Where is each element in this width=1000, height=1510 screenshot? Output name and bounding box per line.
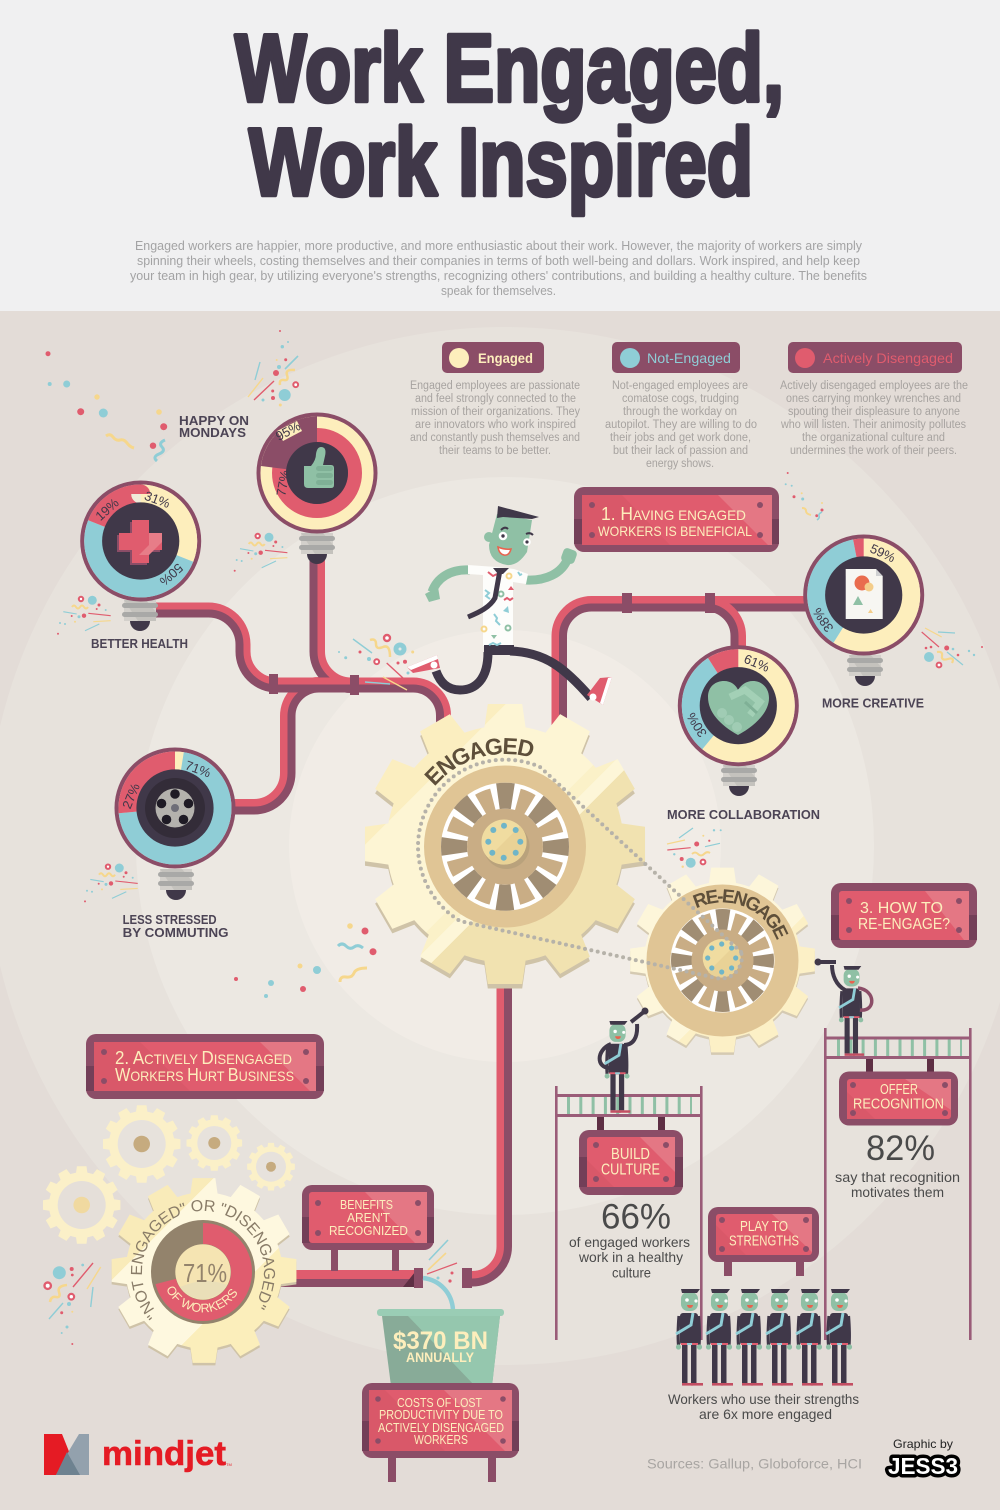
gear: re-engage [630,868,815,1055]
description: not engaged: their jobs and get work done, [610,432,751,444]
title [235,15,784,216]
stat: 82 percent [835,1129,960,1200]
description: actively disengaged [780,380,968,457]
label: happy on mondays: MONDAYS [179,425,246,440]
legend: engaged [442,342,544,373]
small decorative gears [43,1105,295,1244]
caption: workers who use their strengths: Workers who use their strengths [668,1391,859,1407]
dotted belt linking gears [418,760,742,979]
intro paragraph: your team in high gear, by utilizing everyone's strengths, recognizing others' contributions, and building a healthy culture. The benefits [130,268,867,283]
pipe: better health to engaged gear [150,606,447,730]
description: actively disengaged: spouting their displeasure to anyone [788,406,960,418]
sign: costs of lost productivity: PRODUCTIVITY DUE TO [379,1408,503,1422]
confetti: left of the 71 percent gear [44,1263,101,1345]
icon: handshake heart [708,681,769,735]
pipe: branch to collaboration bulb [700,600,742,655]
sign: benefits aren't recognized: RECOGNIZED [329,1224,408,1238]
bulb: better health: 31% [143,488,173,511]
bulb: more collaboration: 30% [683,710,710,740]
description: engaged [410,380,580,457]
credit: graphic by jess3: JESS3 [888,1453,958,1479]
confetti: near the runner's back foot [338,635,414,678]
bulb: more creative: 59% [868,541,898,565]
bucket: $370 bn annually: ANNUALLY [406,1349,475,1365]
pipe collars on right branch [622,593,715,613]
bulb: happy on mondays: 77% [273,468,293,497]
icon: document [846,569,883,619]
label: more collaboration: MORE COLLABORATION [667,807,820,822]
gear: engaged: ENGAGED [424,738,534,786]
stat: 66 percent: work in a healthy [578,1249,683,1265]
caption: workers who use their strengths [668,1391,859,1422]
stat: 66 percent: 66% [601,1198,671,1236]
pipe: engaged gear down to the break [468,975,508,1282]
pipe: right branch to creative bulb [556,600,810,735]
sign: 3. how to re-engage: RE-ENGAGE? [858,916,950,933]
intro paragraph: Engaged workers are happier, more productive, and more enthusiastic about their work. However, the majority of workers are simply [135,238,862,253]
sign: benefits aren't recognized [302,1185,434,1271]
description: not engaged: energy shows. [646,458,714,470]
credit: graphic by jess3: Graphic by [893,1437,953,1451]
label: less stressed by commuting [123,912,229,940]
sign: build culture [579,1117,683,1195]
confetti: bursts near bulbs [57,533,287,902]
scaffold: build culture [555,1086,703,1340]
pipe collar at the break, right [462,1268,472,1288]
bulb: happy on mondays: 95% [273,418,303,444]
confetti at pipe break [427,1240,457,1283]
sign: play to strengths [708,1207,819,1276]
description: not engaged [605,380,757,470]
intro paragraph [130,238,867,298]
intro paragraph: spinning their wheels, costing themselves and their companies in terms of both well-being and dollars. Work inspired, and help keep [137,253,860,268]
description: engaged: mission of their organizations. They [411,406,580,418]
sign: 3. how to re-engage: 3. HOW TO [860,900,943,917]
small gear one [103,1105,180,1183]
confetti: above the more creative bulb [785,472,824,520]
label: less stressed by commuting: BY COMMUTING [123,925,229,940]
shirt pattern [482,572,522,645]
bulb: less stressed by commuting: 27% [119,781,143,811]
description: not engaged: Not-engaged employees are [612,380,748,392]
legend: engaged: Engaged [478,350,533,366]
description: actively disengaged: Actively disengaged employees are the [780,380,968,392]
bucket: $370 bn annually [377,1309,504,1386]
gear: 71 percent of workers: 71% [183,1258,227,1288]
pipe collars on main pipe [269,674,359,695]
sign: offer recognition: RECOGNITION [853,1096,944,1112]
sign: offer recognition [839,1059,958,1126]
label: re-engage: RE-ENGAGE [692,889,788,940]
sign: costs of lost productivity: COSTS OF LOST [397,1396,482,1410]
logo: mindjet: TM [226,1462,232,1467]
bulb: more collaboration [680,647,797,796]
bulb: less stressed by commuting [116,750,234,900]
description: not engaged: comatose cogs, trudging [622,393,739,405]
description: actively disengaged: undermines the work of their peers. [790,445,957,457]
small gear body [630,868,815,1052]
bulb: more creative [805,536,922,686]
main background with concentric rings [0,311,1000,1510]
legend: actively disengaged: Actively Disengaged [823,350,953,366]
bulb: better health: 50% [156,560,186,589]
workers row [676,1289,853,1386]
gear: 71 percent of workers: OF WORKERS [168,1286,237,1312]
bucket: $370 bn annually: $370 BN [393,1327,488,1355]
sign: costs of lost productivity: WORKERS [414,1433,468,1447]
stat: 66 percent [569,1198,690,1280]
small gear two [186,1115,242,1171]
pipe: happy on mondays to main [314,555,351,689]
description: engaged: Engaged employees are passionate [410,380,580,392]
bulb: more collaboration: 61% [742,651,772,675]
label: happy on mondays: HAPPY ON [179,413,249,428]
chip behind 95 percent [277,421,302,441]
logo: mindjet [44,1434,232,1475]
pipe: 71 percent gear to the break [280,1268,423,1288]
legend: not engaged: Not-Engaged [647,350,731,366]
label: better health: BETTER HEALTH [91,636,188,651]
sign: 1. having engaged workers: WORKERS IS BENEFICIAL [598,523,752,539]
gear: engaged [365,704,645,988]
confetti: top left [46,351,167,461]
icon: thumbs up [304,447,334,488]
confetti: left of the engaged gear [234,923,376,998]
confetti: below more collaboration [667,828,722,868]
description: engaged: and constantly push themselves and [410,432,580,444]
small gear four [43,1166,120,1244]
sign: benefits aren't recognized: AREN'T [347,1211,390,1225]
sign: offer recognition: OFFER [880,1081,918,1098]
confetti streaks over main pipe [365,677,407,690]
title: Work Engaged, [235,15,784,122]
legend: not engaged [612,342,740,373]
label: less stressed by commuting: LESS STRESSED [123,912,217,927]
intro paragraph: speak for themselves. [441,283,556,298]
sign: 2. actively disengaged workers [86,1034,324,1099]
description: actively disengaged: who will listen. Their animosity pollutes [780,419,966,431]
sign: 2. actively disengaged workers: 2. ACTIVELY DISENGAGED [115,1048,292,1068]
confetti: near the more creative bulb [922,628,983,667]
description: not engaged: autopilot. They are willing to do [605,419,757,431]
bulb: better health: 19% [92,495,122,524]
sign: 1. having engaged workers [574,487,779,552]
description: actively disengaged: ones carrying monkey wrenches and [786,393,961,405]
sign: build culture: BUILD [611,1146,650,1163]
sign: benefits aren't recognized: BENEFITS [340,1198,393,1212]
gear body [365,704,645,984]
description: not engaged: but their lack of passion and [613,445,748,457]
stat: 82 percent: say that recognition [835,1169,960,1185]
description: not engaged: through the workday on [623,406,737,418]
small gear shadow [630,870,815,1055]
stat: 82 percent: 82% [866,1129,935,1168]
legend: actively disengaged [788,342,962,373]
scaffold: offer recognition [824,1028,972,1340]
sources: Sources: Gallup, Globoforce, HCI [647,1456,862,1472]
character: worker with wrench, left [600,1008,648,1113]
water stream into bucket [423,1278,453,1310]
gear: 71 percent of workers [112,1178,296,1366]
stat: 66 percent: of engaged workers [569,1234,690,1250]
stat: 82 percent: motivates them [851,1184,944,1200]
character: running man [407,506,612,705]
small gear three [247,1143,295,1191]
icon: tire [145,778,205,838]
description: engaged: their teams to be better. [439,445,551,457]
sign: costs of lost productivity: ACTIVELY DISENGAGED [378,1421,504,1435]
gear shadow [365,708,645,989]
character: worker with wrench, right [814,958,872,1056]
sign: play to strengths: STRENGTHS [729,1232,799,1250]
stat: 66 percent: culture [612,1264,651,1280]
pipe: less stressed to main [230,681,319,810]
logo: mindjet: mindjet [102,1435,226,1473]
sign: 1. having engaged workers: 1. HAVING ENGAGED [601,504,746,524]
bulb: happy on mondays [258,414,376,564]
bulb: less stressed by commuting: 71% [183,758,213,781]
gear: 71 percent of workers: "NOT ENGAGED" OR "DISENGAGED" [130,1200,276,1320]
confetti: near happy on mondays [248,330,298,406]
label: happy on mondays [179,413,249,440]
caption: workers who use their strengths: are 6x more engaged [699,1406,832,1422]
sign: build culture: CULTURE [601,1162,660,1178]
title: Work Inspired [249,109,753,216]
credit: graphic by jess3 [888,1437,958,1479]
bulb: more creative: 38% [809,605,836,635]
header background [0,0,1000,311]
bulb: better health [82,482,199,631]
description: engaged: and feel strongly connected to the [415,393,576,405]
sign: play to strengths: PLAY TO [740,1218,788,1235]
description: engaged: are innovators who work inspired [415,419,576,431]
label: more creative: MORE CREATIVE [822,696,924,710]
sign: costs of lost productivity [362,1383,519,1482]
sign: 3. how to re-engage [831,883,977,948]
description: actively disengaged: the organizational culture and [802,432,945,444]
sign: 2. actively disengaged workers: WORKERS HURT BUSINESS [115,1065,294,1085]
icon: medical cross [117,520,162,565]
